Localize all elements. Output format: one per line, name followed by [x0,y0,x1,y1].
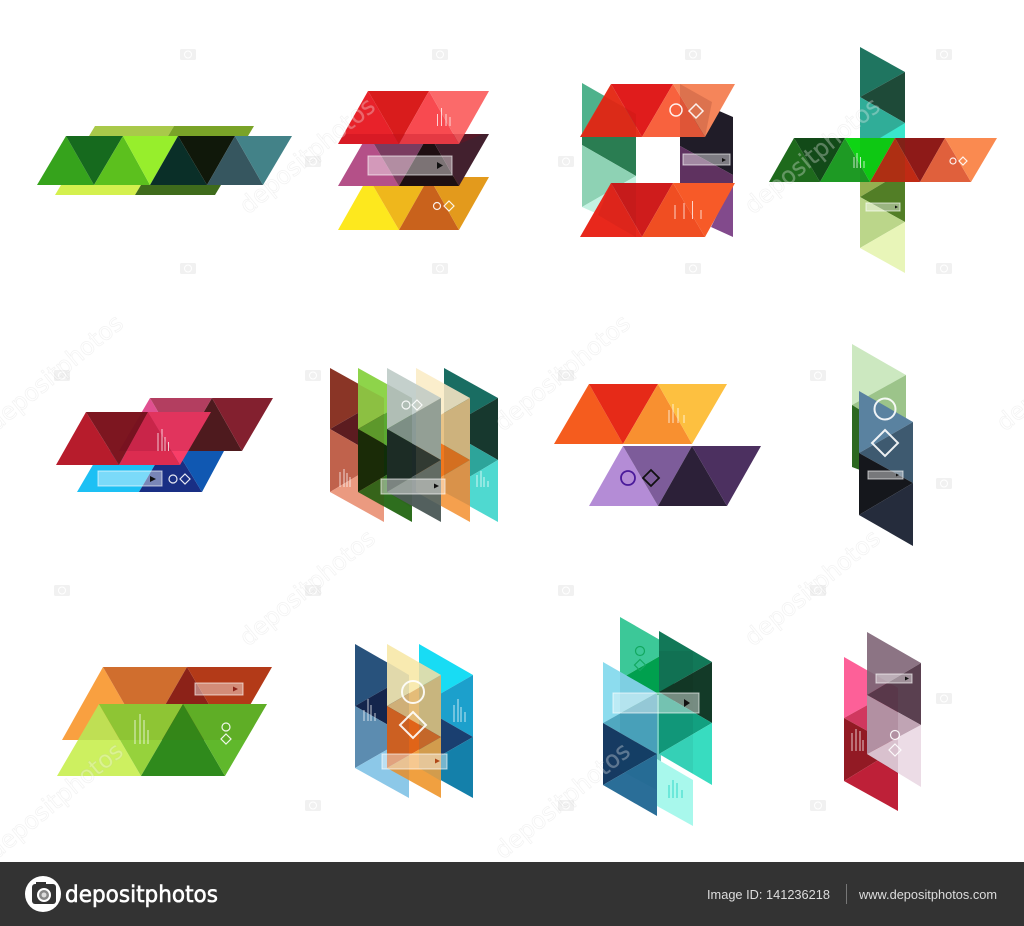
text box with arrow [382,754,447,769]
icon: circle and diamond [670,104,703,118]
text box with arrow [195,683,243,695]
background: watermark camera icons [54,49,952,811]
panel: green and slate vertical bands [852,344,913,546]
panel: plus-shaped cross of green and orange banners [769,47,997,273]
icon: right bar chart [454,699,465,722]
icon: bar chart [852,729,863,751]
panel: crimson and blue overlapping banners [56,398,273,492]
panel: stacked red, purple and yellow banners [338,91,489,230]
text box with arrow [613,693,699,713]
icon: bar chart [438,108,450,126]
icon: right bar chart [477,471,488,487]
text box with arrow [868,471,903,479]
watermark text: depositphotos [739,92,886,220]
icon: camera logo [25,876,61,912]
icon: circle and diamond [889,730,901,756]
icon: circle and diamond [950,157,967,165]
icon: bar chart [135,714,148,744]
icon: circle and diamond [402,400,422,410]
logo wordmark: depositphotos [65,882,218,908]
text box with arrow [98,471,162,486]
panel: green horizontal banner [37,126,292,195]
text box with arrow [368,156,452,175]
panel: orange and lime overlapping banners [57,667,272,776]
watermark text: depositphotos [489,309,636,437]
watermark text: depositphotos [234,524,381,652]
icon: bar chart [158,429,168,451]
text box with arrow [381,479,445,494]
panel: red square frame with side columns [580,83,735,237]
panel: blue and amber vertical bands [355,644,473,798]
panel: orange and purple offset banners [554,384,761,506]
icon: circle and diamond [221,723,231,744]
text box with arrow [876,674,912,683]
text box with arrow [866,203,900,211]
icon: bar chart [675,201,701,219]
icon: bar chart [669,780,682,798]
watermark text: depositphotos [234,92,381,220]
icon: bar chart [669,404,684,423]
panel: five vertical coloured bands [330,368,498,522]
icon: left bar chart [340,469,350,487]
icon: left bar chart [364,699,375,721]
watermark text: depositphotos [739,524,886,652]
website url: www.depositphotos.com [858,888,997,902]
image id: Image ID: 141236218 [707,888,830,902]
panel: pink and mauve vertical bands [844,632,921,811]
footer bar [0,862,1024,926]
icon: circle and diamond [634,646,646,670]
icon: circle and diamond [434,201,454,211]
icon: circle and diamond [400,681,426,738]
watermark text: depositphotos [489,737,636,865]
icon: circle and diamond [621,470,659,486]
icon: circle and diamond [169,474,190,484]
text box with arrow [683,154,730,165]
panel: teal and navy vertical bands [603,617,712,826]
icon: circle and diamond [872,398,898,456]
icon: bar chart [854,153,864,168]
